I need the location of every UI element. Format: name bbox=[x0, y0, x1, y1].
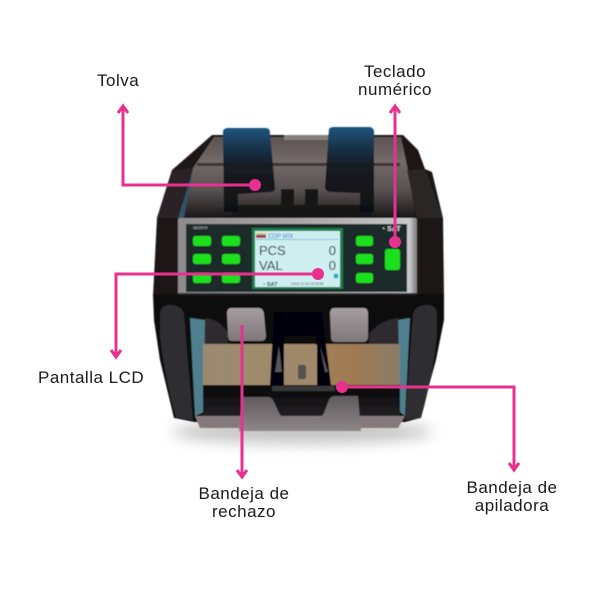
LCD display: 2026-12-06 05:08:58 bbox=[291, 282, 324, 286]
label: Teclado numérico: numérico bbox=[358, 80, 432, 99]
machine upper housing bbox=[153, 135, 444, 296]
label: Bandeja de apiladora: Bandeja de bbox=[466, 478, 558, 497]
LCD display: PCS bbox=[259, 243, 286, 258]
callout: Tolva bbox=[97, 71, 261, 191]
LCD display: VAL bbox=[259, 258, 283, 273]
LCD display: 0 bbox=[329, 258, 336, 273]
LCD display: 0 bbox=[329, 243, 336, 258]
callout: Teclado numérico bbox=[358, 62, 432, 248]
label: Tolva: Tolva bbox=[97, 71, 139, 90]
hopper left bbox=[223, 128, 275, 212]
label: Pantalla LCD: Pantalla LCD bbox=[38, 368, 144, 387]
left buttons bbox=[193, 236, 240, 283]
hopper right bbox=[325, 127, 374, 212]
callout: Bandeja de rechazo bbox=[198, 325, 290, 521]
feed slot bbox=[232, 189, 372, 218]
LCD display: ◔ SAT bbox=[262, 282, 278, 288]
grey button right bbox=[330, 308, 368, 342]
machine lower body bbox=[153, 294, 444, 422]
control panel bbox=[178, 218, 417, 295]
cash counting machine bbox=[153, 127, 444, 444]
right buttons bbox=[356, 236, 400, 283]
floor shadow bbox=[172, 420, 432, 444]
grey button left bbox=[227, 308, 266, 341]
LCD display: COP MIX bbox=[268, 234, 293, 240]
lower tray strip bbox=[195, 416, 405, 428]
label: Teclado numérico: Teclado bbox=[364, 62, 426, 81]
model label: SD2570 bbox=[193, 225, 208, 230]
label: Bandeja de rechazo: Bandeja de bbox=[198, 484, 290, 503]
rejection plate bbox=[203, 344, 400, 385]
callout: Bandeja de apiladora bbox=[336, 381, 558, 515]
centre note guides bbox=[270, 312, 331, 385]
brand label: ◔ SAT bbox=[381, 226, 401, 233]
label: Bandeja de apiladora: apiladora bbox=[475, 496, 549, 515]
callout: Pantalla LCD bbox=[38, 268, 324, 387]
front tray bbox=[239, 396, 361, 431]
LCD display bbox=[252, 228, 343, 289]
label: Bandeja de rechazo: rechazo bbox=[212, 502, 276, 521]
